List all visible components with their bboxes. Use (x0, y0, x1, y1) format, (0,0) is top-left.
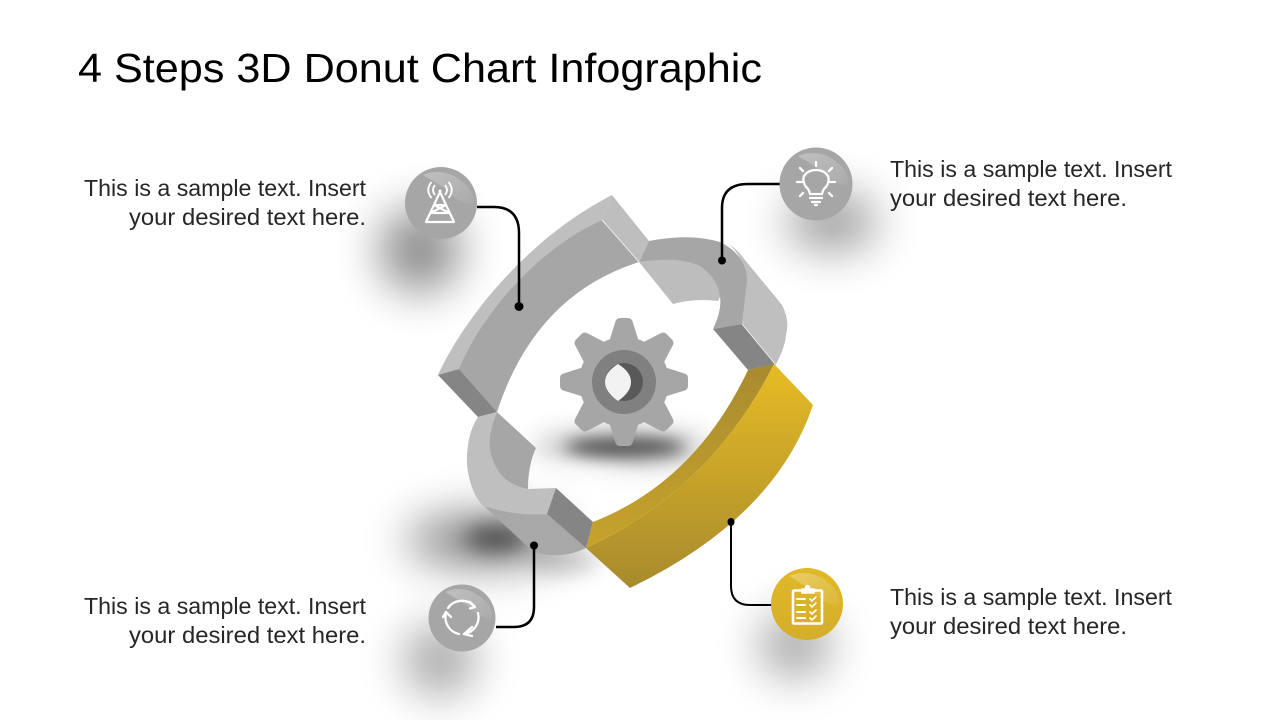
text: bottom right: your desired text here. (890, 613, 1127, 639)
icon: tower (405, 167, 477, 239)
text: bottom left: This is a sample text. Insert (84, 593, 367, 619)
text: bottom left: your desired text here. (129, 622, 366, 648)
icon: clipboard (771, 568, 843, 640)
text: top left: This is a sample text. Insert (84, 175, 367, 201)
text: top left (84, 175, 367, 230)
segment: top right (639, 237, 787, 370)
segment: yellow (586, 364, 813, 588)
connector: bottom left (496, 542, 538, 627)
text: top right: This is a sample text. Insert (890, 156, 1173, 182)
text: bottom right: This is a sample text. Insert (890, 584, 1173, 610)
connector: top right (718, 184, 780, 264)
icon: light bulb (780, 148, 852, 220)
connector: bottom right (728, 518, 772, 605)
text: top right: your desired text here. (890, 185, 1127, 211)
segment: top left (438, 195, 649, 417)
donut chart (438, 195, 813, 588)
icon: gear (560, 318, 688, 446)
title: 4 Steps 3D Donut Chart Infographic (78, 45, 762, 91)
text: bottom left (84, 593, 367, 648)
text: bottom right (890, 584, 1173, 639)
shadows (380, 194, 877, 695)
segment: bottom left (467, 412, 593, 555)
text: top left: your desired text here. (129, 204, 366, 230)
text: top right (890, 156, 1173, 211)
icon: cycle arrows (428, 584, 496, 652)
connector: top left (477, 207, 524, 311)
